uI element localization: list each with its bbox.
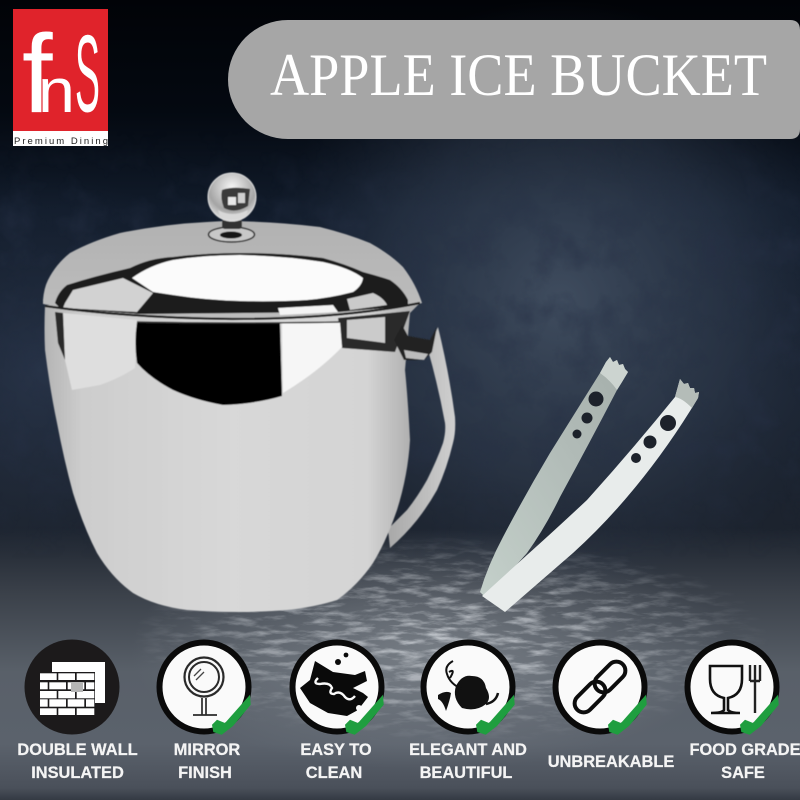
brand logo [13,9,108,147]
label: EASY TO [300,741,372,759]
feature: double wall insulated [17,640,138,782]
label: DOUBLE WALL [17,741,138,759]
label: BEAUTIFUL [420,764,512,782]
ice tongs [480,357,699,612]
label: FOOD GRADE [689,741,800,759]
hinge pin [394,325,437,360]
feature: mirror finish [160,642,251,782]
feature: unbreakable [548,642,674,771]
icon: chain link [556,642,647,735]
ice bucket product [43,173,455,612]
label: MIRROR [174,741,240,759]
brand logo: n [38,56,75,126]
lid [43,221,422,318]
left tong arm [480,357,628,597]
label: FINISH [178,764,232,782]
lower left reflection panel [63,313,137,390]
lid rim line [45,303,420,319]
label: ELEGANT AND [409,741,527,759]
lid white dome [132,255,363,301]
brand logo: f [22,13,53,136]
bucket handle [388,327,455,548]
icon: mirror [160,642,251,735]
right hinge shadow panel [338,311,410,352]
brand logo: Premium Dining [14,136,108,147]
brand logo: S [75,14,100,136]
knob base [208,227,254,242]
bucket body [44,303,420,612]
icon: hand wiping [292,642,384,735]
feature: food grade safe [688,642,800,782]
lid dark crescent [55,253,408,314]
lid right reflection [347,293,387,310]
feature: easy to clean [292,642,384,782]
title banner [228,20,800,139]
right tong arm [482,379,699,612]
left dark sliver [55,312,65,360]
label: UNBREAKABLE [548,753,674,771]
knob neck [222,219,242,229]
icon: brick wall [24,640,120,734]
left tip shading [600,357,628,390]
reflection below rim: white strip [278,305,338,315]
feature: elegant and beautiful [409,642,527,782]
label: CLEAN [306,764,362,782]
icon: glass and fork [688,642,779,735]
knob ball [208,173,256,221]
rim lower shadow [137,322,340,323]
icon: heart ornament [424,642,515,735]
white reflection [282,322,342,393]
dark reflection [136,322,282,405]
right tip shading [675,379,699,408]
tong holes [572,392,676,463]
lid left panel [63,278,153,312]
label: SAFE [721,764,765,782]
right reflection panel [347,317,385,343]
label: INSULATED [31,764,124,782]
